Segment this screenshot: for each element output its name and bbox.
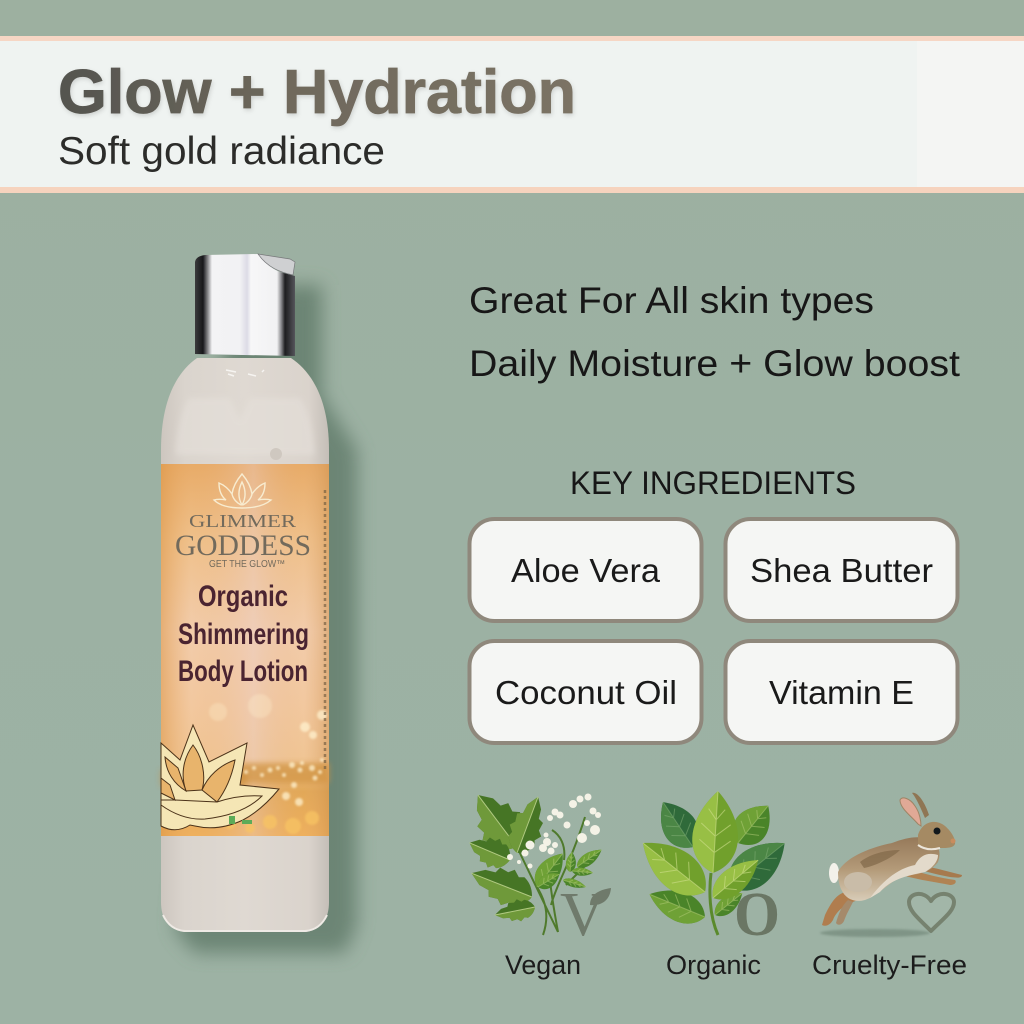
bottle shadow (175, 285, 357, 953)
cap flip top (258, 254, 295, 275)
label: cruelty-free: Cruelty-Free (812, 950, 967, 980)
header banner (0, 36, 1024, 193)
small text on label edge (324, 490, 326, 770)
bottle body (161, 358, 329, 932)
product name: Shimmering (178, 618, 309, 651)
product name (178, 580, 309, 688)
benefit lines: Great For All skin types (469, 280, 874, 321)
brand name: GET THE GLOW™ (209, 559, 285, 570)
ingredient chip: shea butter: Shea Butter (750, 552, 933, 589)
vegan V mark: V (560, 881, 606, 949)
product name: Organic (198, 580, 288, 613)
ingredient chip: vitamin e: Vitamin E (769, 674, 914, 711)
ingredient chip: aloe vera (470, 519, 702, 621)
rabbit shadow (820, 929, 930, 937)
icon: vegan sprig (459, 781, 611, 949)
icon: jumping rabbit (820, 793, 962, 937)
product bottle (161, 254, 357, 953)
flowers (507, 794, 601, 868)
logo lotus (214, 474, 271, 508)
glitter bokeh (161, 694, 329, 834)
benefit lines: Daily Moisture + Glow boost (469, 343, 961, 384)
label: organic: Organic (666, 950, 761, 980)
organic O mark: O (734, 881, 780, 949)
recycling marks (229, 816, 252, 824)
ingredient chip: aloe vera: Aloe Vera (511, 552, 661, 589)
ingredient chip: coconut oil: Coconut Oil (495, 674, 677, 711)
key ingredients heading: KEY INGREDIENTS (570, 465, 856, 501)
rabbit ears (912, 793, 929, 818)
bottle label (161, 464, 329, 836)
icon: heart outline (909, 894, 954, 931)
label: vegan: Vegan (505, 950, 581, 980)
brand name: GLIMMER (189, 511, 296, 531)
bottle cap (195, 254, 295, 356)
rabbit head (918, 822, 955, 849)
benefit lines (469, 280, 961, 384)
brand name: GODDESS (175, 529, 311, 562)
title: Glow + Hydration (58, 58, 576, 127)
rabbit tail (829, 863, 839, 883)
ingredient chip: shea butter (726, 519, 958, 621)
subtitle: Soft gold radiance (58, 130, 385, 173)
ingredient chip: vitamin e (726, 641, 958, 743)
product name: Body Lotion (178, 655, 308, 688)
rabbit body (838, 837, 939, 901)
icon: organic leaves (631, 790, 796, 949)
ingredient chip: coconut oil (470, 641, 702, 743)
large lotus outline (161, 725, 279, 830)
brand name (175, 511, 311, 570)
